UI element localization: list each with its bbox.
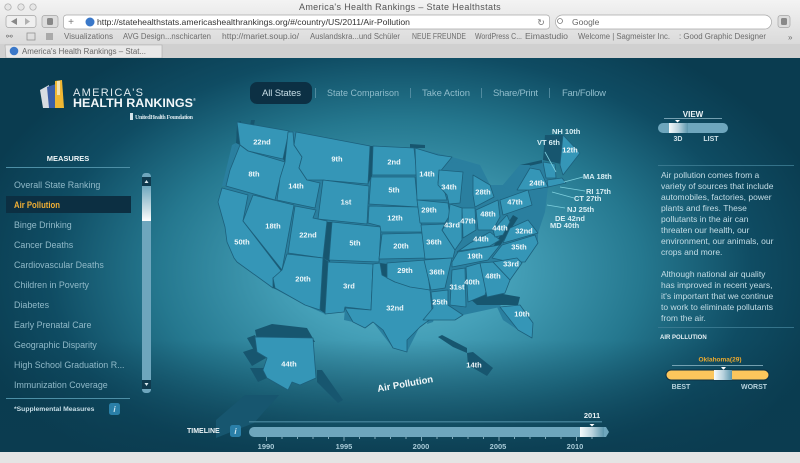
year labels: 2000 (413, 442, 429, 451)
icon: logo bars (40, 80, 64, 108)
navigation: Fan/Follow (562, 88, 606, 99)
logo (40, 80, 196, 121)
SC (503, 220, 538, 243)
state rank labels: 28th (475, 188, 491, 196)
AR (423, 290, 463, 320)
measure list: Immunization Coverage (14, 380, 108, 390)
northeast callout labels: MA 18th (583, 172, 612, 181)
year labels (258, 442, 583, 451)
browser chrome: + (68, 17, 74, 28)
state rank labels: 33rd (503, 260, 519, 268)
state rank labels: 2nd (387, 158, 401, 166)
bookmarks bar: » (788, 33, 793, 42)
year labels: 2005 (490, 442, 506, 451)
air pollution slider: WORST (741, 384, 768, 391)
state rank labels: 47th (507, 198, 523, 206)
air pollution slider (660, 335, 769, 391)
state rank labels: 14th (419, 170, 435, 178)
state rank labels: 5th (349, 238, 361, 248)
browser chrome: Google (572, 17, 600, 27)
northeast callout labels: VT 6th (537, 138, 560, 147)
northeast callout labels: RI 17th (586, 187, 611, 196)
state rank labels: 20th (295, 274, 311, 284)
CO (325, 262, 373, 314)
measure list: Cardiovascular Deaths (14, 260, 104, 270)
icon: timeline info button: i (234, 427, 237, 436)
MT (318, 180, 369, 224)
bookmarks bar: Visualizations (64, 32, 113, 41)
navigation (250, 82, 606, 104)
SD (368, 206, 423, 232)
description text: to work to eliminate pollutants (661, 302, 773, 312)
description text: threaten our health, our (661, 225, 750, 235)
browser chrome: ↻ (537, 18, 545, 28)
medium extruded walls (222, 143, 548, 338)
view toggle (658, 110, 728, 143)
state rank labels: 20th (393, 242, 409, 250)
state shapes (218, 122, 580, 390)
bookmarks bar (6, 32, 793, 42)
VT NH (547, 178, 566, 187)
MO (424, 258, 452, 290)
description text: it's important that we continue (661, 291, 773, 301)
state rank labels: 10th (514, 310, 530, 318)
NC (493, 258, 522, 280)
GA (452, 245, 500, 267)
state rank labels: 34th (441, 182, 457, 192)
browser tab: America's Health Rankings – Stat... (22, 47, 146, 56)
ND (369, 177, 418, 207)
state rank labels: 35th (511, 242, 527, 252)
year labels: 1990 (258, 442, 274, 451)
description text: crops and more. (661, 247, 722, 257)
measure list: Early Prenatal Care (14, 320, 92, 330)
state rank labels: 32nd (386, 304, 404, 312)
WI (417, 200, 450, 223)
view toggle: LIST (703, 136, 719, 143)
northeast callout labels: MD 40th (550, 221, 580, 230)
VA (493, 215, 510, 237)
description text (661, 170, 774, 323)
OK (415, 148, 452, 200)
bookmarks bar: NEUE FREUNDE (412, 32, 466, 41)
bookmarks bar: WordPress C... (475, 32, 522, 41)
northeast callout labels: NJ 25th (567, 205, 595, 214)
map title: Air Pollution (376, 374, 434, 395)
navigation: State Comparison (327, 88, 399, 99)
state rank labels: 44th (281, 360, 297, 368)
description text: from the air. (661, 313, 706, 323)
measure list (14, 180, 125, 390)
description text: pollutants in the air can (661, 214, 749, 224)
FL (255, 337, 316, 390)
MI (500, 190, 532, 215)
state rank labels: 31st (449, 282, 465, 292)
description text: Although national air quality (661, 269, 766, 279)
browser tab (5, 45, 162, 58)
bookmarks bar: AVG Design...nschicarten (123, 32, 211, 41)
navigation: All States (262, 88, 301, 99)
WY (218, 188, 282, 288)
panel: measures: MEASURES (47, 154, 89, 163)
logo: HEALTH RANKINGS (73, 96, 193, 110)
state rank labels: 44th (492, 224, 508, 232)
logo: UnitedHealth Foundation (135, 115, 194, 121)
measure list: Air Pollution (14, 200, 60, 210)
measure list: Binge Drinking (14, 220, 72, 230)
IN (442, 204, 462, 250)
bookmarks bar: Welcome | Sagmeister Inc. (578, 32, 670, 41)
WV (476, 200, 500, 230)
map underlay silhouette (218, 122, 548, 352)
air pollution slider: Oklahoma(29) (698, 356, 742, 364)
bookmarks bar: http://mariet.soup.io/ (222, 32, 300, 41)
bookmarks bar: Eimastudio (525, 32, 569, 41)
state rank labels: 14th (288, 182, 304, 190)
state rank labels: 5th (388, 186, 400, 194)
KY (492, 235, 538, 262)
state rank labels: 44th (473, 234, 489, 244)
measure list: Cancer Deaths (14, 240, 74, 250)
year labels: 2010 (567, 442, 583, 451)
PA (517, 168, 548, 190)
MS (466, 263, 487, 302)
TX (372, 146, 417, 175)
description text: environment, our animals, our (661, 236, 774, 246)
description text: variety of sources that include (661, 181, 774, 191)
map of US states (216, 120, 612, 438)
KS (387, 260, 430, 290)
year labels: 1995 (336, 442, 352, 451)
dark extruded walls (216, 120, 563, 438)
state rank labels: 32nd (515, 226, 533, 236)
OH (462, 208, 476, 238)
description text: automobiles, factories, power (661, 192, 772, 202)
WA (226, 145, 285, 200)
active nav pill (250, 82, 312, 104)
state rank labels: 25th (432, 298, 448, 306)
state rank labels: 48th (485, 272, 501, 280)
timeline: TIMELINE (187, 428, 220, 435)
northeast callout labels: CT 27th (574, 194, 602, 203)
state rank labels: 8th (248, 170, 260, 178)
state rank labels: 12th (562, 146, 578, 154)
icon: timeline info button (230, 425, 241, 437)
NM (345, 263, 432, 352)
bookmarks bar: ⚯ (6, 32, 13, 41)
browser chrome: America's Health Rankings – State Healthstats (299, 2, 501, 12)
state rank labels: 43rd (444, 220, 460, 230)
state rank labels: 24th (529, 178, 545, 188)
state rank labels (234, 138, 578, 370)
IA (421, 224, 455, 259)
description text: plants and fires. These (661, 203, 747, 213)
measure list: Children in Poverty (14, 280, 90, 290)
state rank labels: 19th (467, 252, 483, 260)
ME (543, 162, 556, 178)
tick marks (266, 437, 592, 441)
MN (438, 170, 463, 204)
NE (379, 233, 427, 259)
navigation: Share/Print (493, 88, 538, 99)
logo: AMERICA'S (73, 87, 143, 99)
selected measure bar (6, 196, 131, 213)
state rank labels: 12th (387, 214, 403, 222)
view toggle: 3D (674, 136, 682, 143)
MA (500, 305, 533, 338)
northeast callout labels: DE 42nd (555, 214, 585, 223)
state rank labels: 48th (480, 210, 496, 218)
measure list: Diabetes (14, 300, 50, 310)
state rank labels: 50th (234, 238, 250, 246)
NV (288, 206, 327, 258)
measure list: High School Graduation R... (14, 360, 125, 370)
panel: measures (6, 154, 151, 415)
state rank labels: 9th (331, 154, 343, 164)
description text: has improved in recent years, (661, 280, 772, 290)
state rank labels: 22nd (253, 138, 271, 146)
browser chrome (0, 0, 800, 58)
state rank labels: 47th (460, 216, 476, 226)
state rank labels: 40th (464, 278, 480, 286)
view toggle: VIEW (683, 110, 704, 119)
measure list: Overall State Ranking (14, 180, 100, 190)
icon: info button (109, 403, 120, 415)
measure list: Geographic Disparity (14, 340, 97, 350)
logo: ® (193, 97, 196, 102)
state rank labels: 3rd (343, 282, 355, 290)
browser chrome: http://statehealthstats.americashealthrankings.org/#/country/US/2011/Air-Pollution (97, 17, 410, 27)
state rank labels: 18th (265, 222, 281, 230)
state rank labels: 36th (429, 268, 445, 276)
NY (560, 135, 580, 175)
air pollution slider: BEST (672, 384, 691, 391)
bookmarks bar: Auslandskra...und Schüler (310, 32, 400, 41)
TN (457, 232, 500, 252)
state rank labels: 29th (397, 266, 413, 275)
state rank labels: 1st (341, 198, 352, 206)
bookmarks bar: : Good Graphic Designer (679, 32, 766, 41)
timeline (187, 411, 609, 451)
timeline: 2011 (584, 411, 600, 420)
state rank labels: 14th (466, 360, 482, 370)
AZ (329, 222, 381, 262)
icon: info button: i (113, 405, 116, 414)
state rank labels: 36th (426, 238, 442, 246)
air pollution slider: AIR POLLUTION (660, 335, 707, 341)
scrollbar (142, 173, 151, 393)
UT (273, 254, 323, 310)
ID (294, 132, 370, 184)
OR (277, 132, 320, 208)
AL (480, 262, 510, 297)
state rank labels: 29th (421, 206, 437, 214)
navigation: Take Action (422, 88, 470, 99)
northeast callout labels: NH 10th (552, 127, 581, 136)
CA (243, 195, 294, 270)
state rank labels: 22nd (299, 230, 317, 240)
LA (450, 268, 466, 307)
description text: Air pollution comes from a (661, 170, 760, 180)
northeast callout labels (537, 127, 612, 230)
panel: measures: *Supplemental Measures (14, 406, 95, 413)
IL (473, 175, 494, 207)
